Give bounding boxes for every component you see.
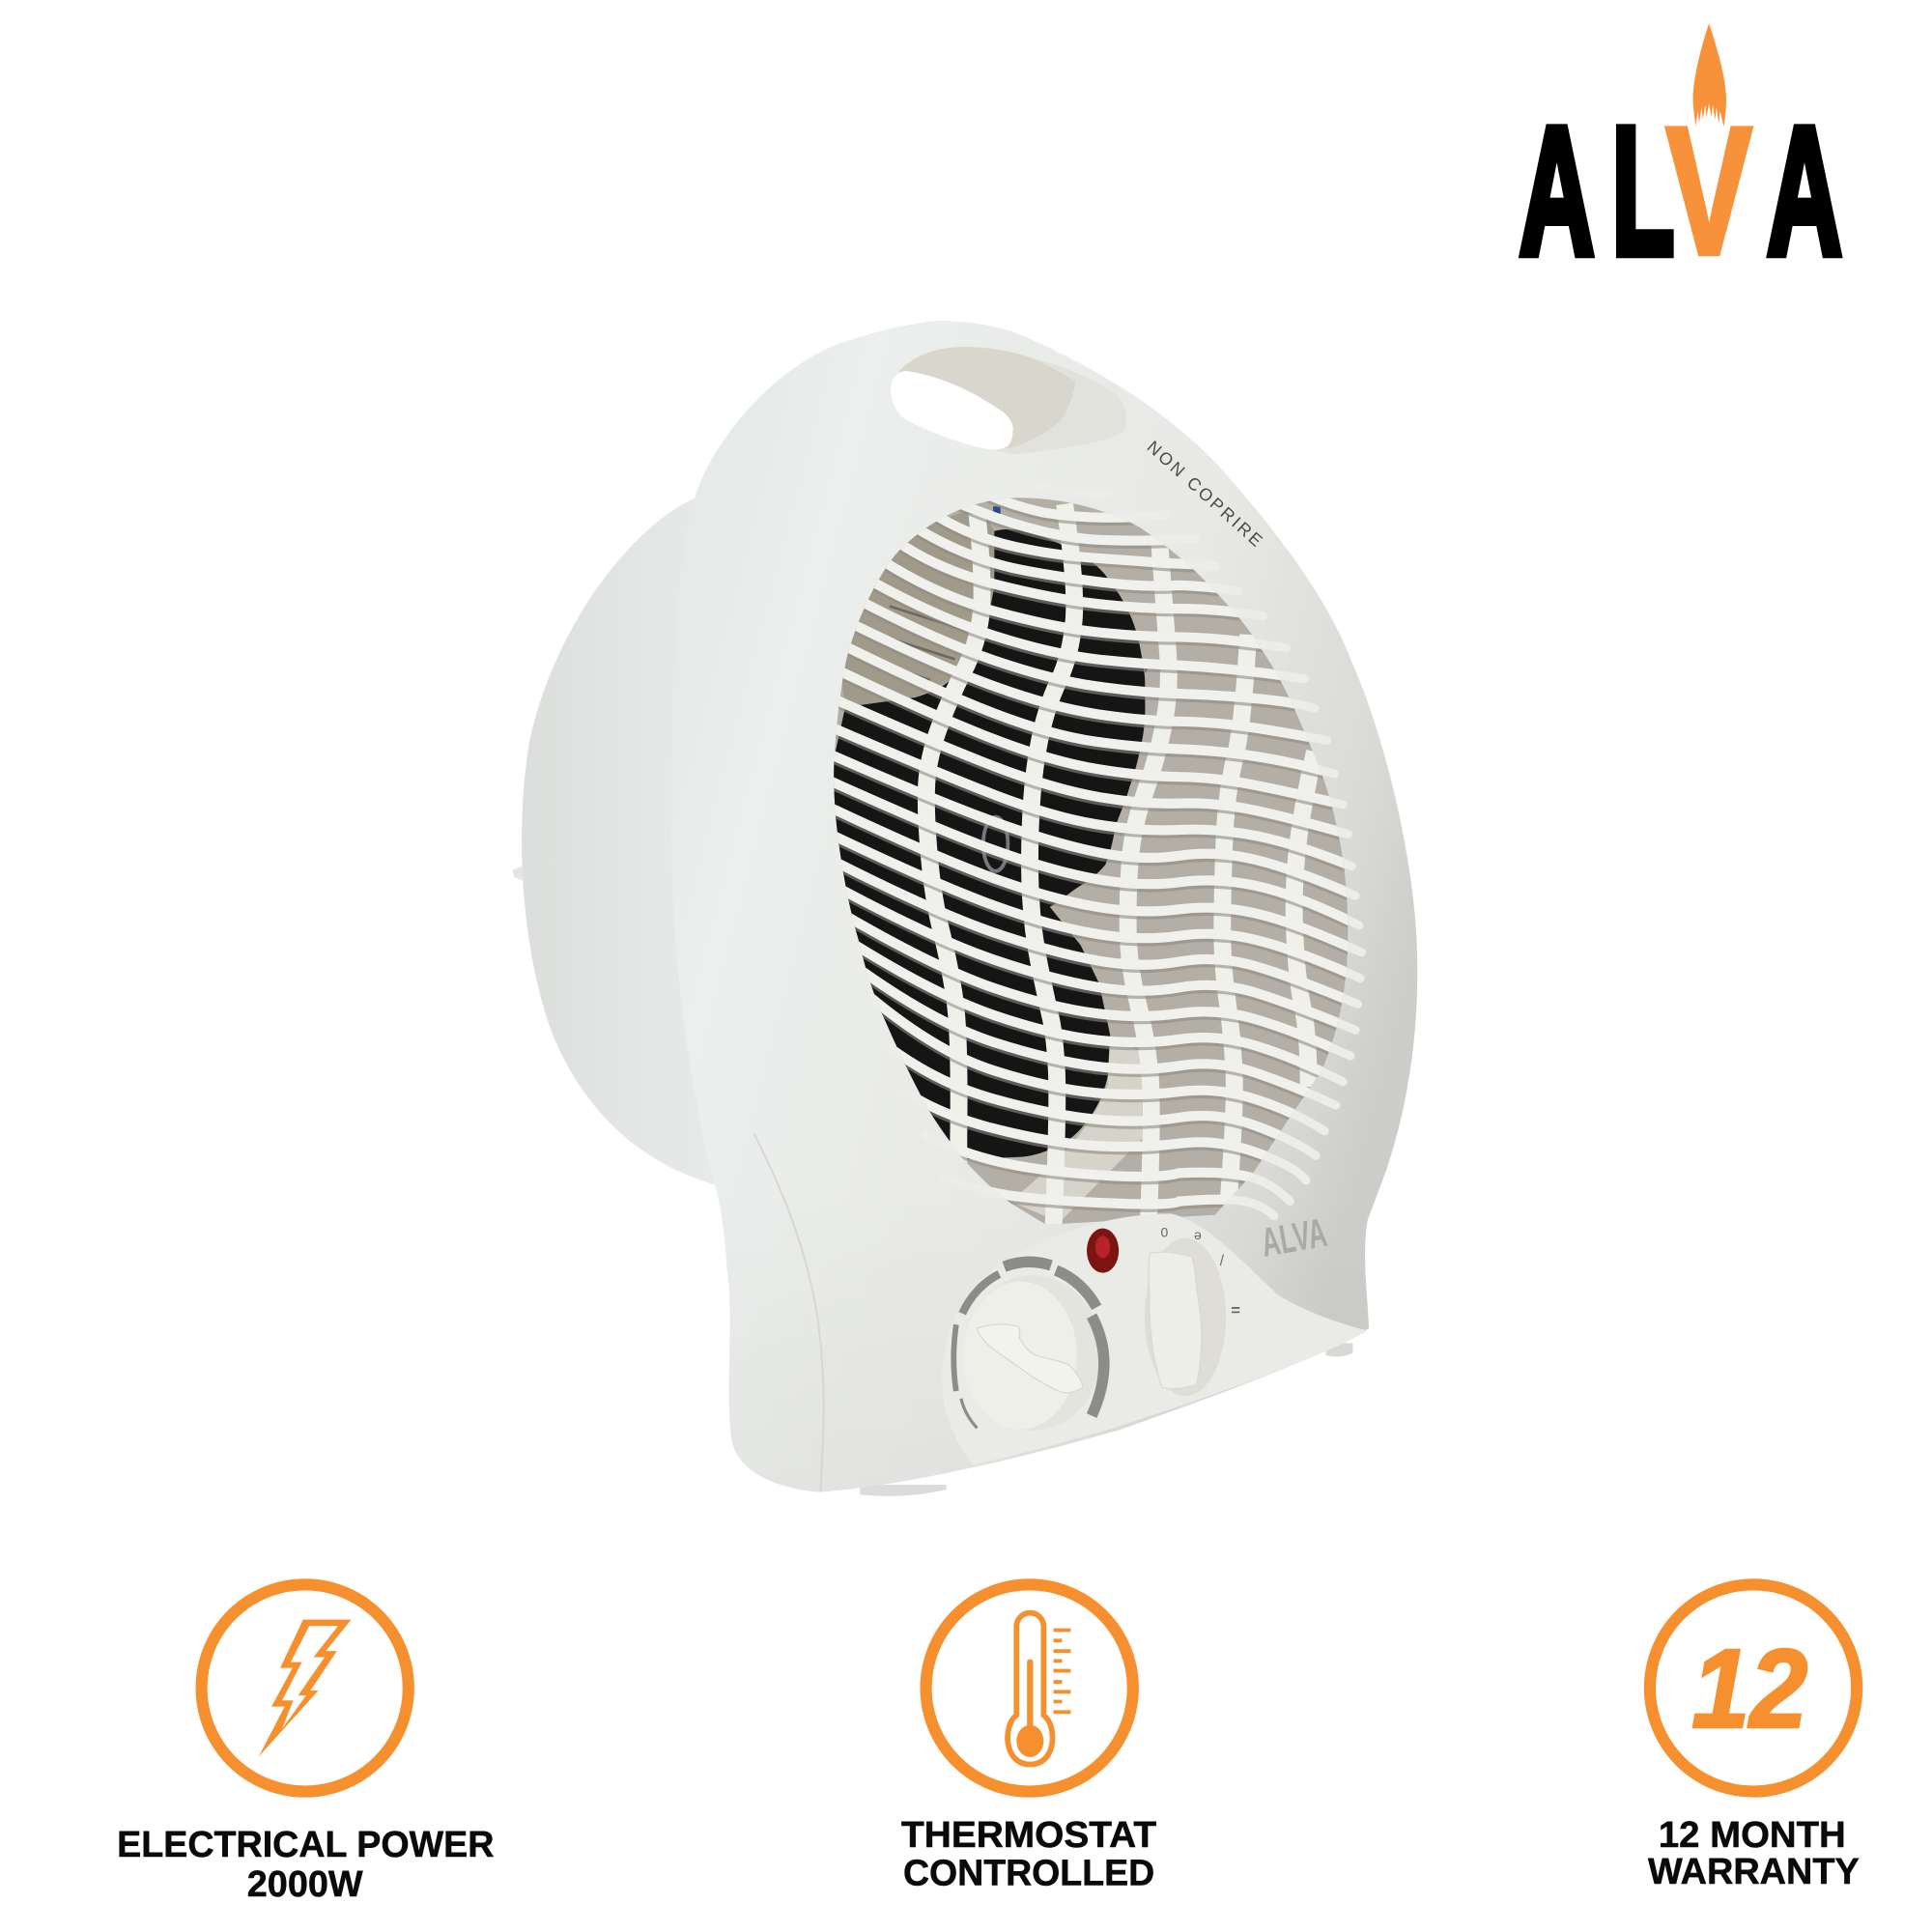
caption: 2000W (247, 1863, 364, 1905)
grille interior (813, 505, 1150, 1222)
handle inner wall (898, 347, 1076, 450)
dark fan interior (813, 529, 1145, 1159)
dial bezel (963, 1275, 1101, 1431)
selector mark 0: 0 (1161, 1225, 1169, 1240)
feature: warranty (1648, 1584, 1860, 1892)
icon: number 12: 12 (1691, 1626, 1807, 1751)
icon: lightning bolt (259, 1620, 352, 1756)
heating coil wires (889, 580, 967, 681)
handle hole (891, 371, 1013, 450)
lit wedge behind fan (1010, 1035, 1142, 1222)
thermometer outline (1008, 1613, 1053, 1765)
heating coil area (838, 505, 994, 707)
caption: 12 MONTH (1659, 1814, 1846, 1856)
grille vertical bars (926, 504, 1315, 1226)
caption: THERMOSTAT (901, 1814, 1156, 1856)
dial disc (963, 1282, 1077, 1430)
selector bezel (1145, 1238, 1226, 1396)
red wire speck (1144, 668, 1148, 672)
blue wire speck (993, 506, 1001, 514)
icon ring (202, 1584, 409, 1792)
grille horizontal ribs (827, 466, 1361, 1216)
mode selector switch (1145, 1225, 1240, 1396)
temperature dial (953, 1262, 1104, 1431)
feature: thermostat (901, 1584, 1156, 1894)
brand logo: ALVA with flame (1520, 23, 1842, 294)
icon ring (1650, 1584, 1857, 1792)
logo letter A: A (1767, 90, 1842, 294)
body seam (754, 1133, 824, 1491)
selector mark fan: ə (1194, 1227, 1202, 1242)
control panel (942, 1213, 1368, 1465)
grille opening (834, 497, 1348, 1225)
heater rear dome (522, 499, 863, 1185)
selector mark II: = (1231, 1301, 1240, 1320)
dial scale arcs (953, 1262, 1104, 1428)
grille rib shadows (827, 469, 1361, 1219)
caption: WARRANTY (1648, 1851, 1860, 1892)
caption: CONTROLLED (903, 1853, 1154, 1894)
feature: electrical power (117, 1584, 494, 1905)
rear nub (513, 867, 524, 881)
grille rib tips on body (827, 466, 1361, 1216)
foot right (1325, 1343, 1353, 1356)
foot left (860, 1485, 947, 1496)
selector mark I: / (1220, 1253, 1225, 1269)
logo letter V: V (1665, 90, 1752, 294)
fan hub (983, 817, 1008, 871)
logo on heater body: ALVA (1258, 1209, 1330, 1265)
indicator light (1087, 1229, 1119, 1273)
selector knob (1149, 1252, 1202, 1389)
mercury bulb (1016, 1725, 1043, 1757)
dial grip (977, 1324, 1083, 1393)
product photo: fan heater (513, 321, 1417, 1496)
mercury column (1028, 1662, 1033, 1731)
caption: ELECTRICAL POWER (117, 1824, 494, 1865)
scale ticks (1054, 1631, 1070, 1712)
LED rim (1087, 1229, 1119, 1273)
logo letter A: A (1520, 90, 1595, 294)
icon: flame (1693, 23, 1726, 127)
handle grip (992, 357, 1126, 455)
LED glow (1095, 1236, 1110, 1258)
icon: thermometer (1008, 1613, 1070, 1765)
label: NON COPRIRE: NON COPRIRE (1144, 437, 1266, 551)
logo letter L: L (1611, 90, 1674, 294)
heater main body (671, 321, 1417, 1492)
body lower shading (712, 1177, 1369, 1492)
icon ring (926, 1584, 1133, 1792)
